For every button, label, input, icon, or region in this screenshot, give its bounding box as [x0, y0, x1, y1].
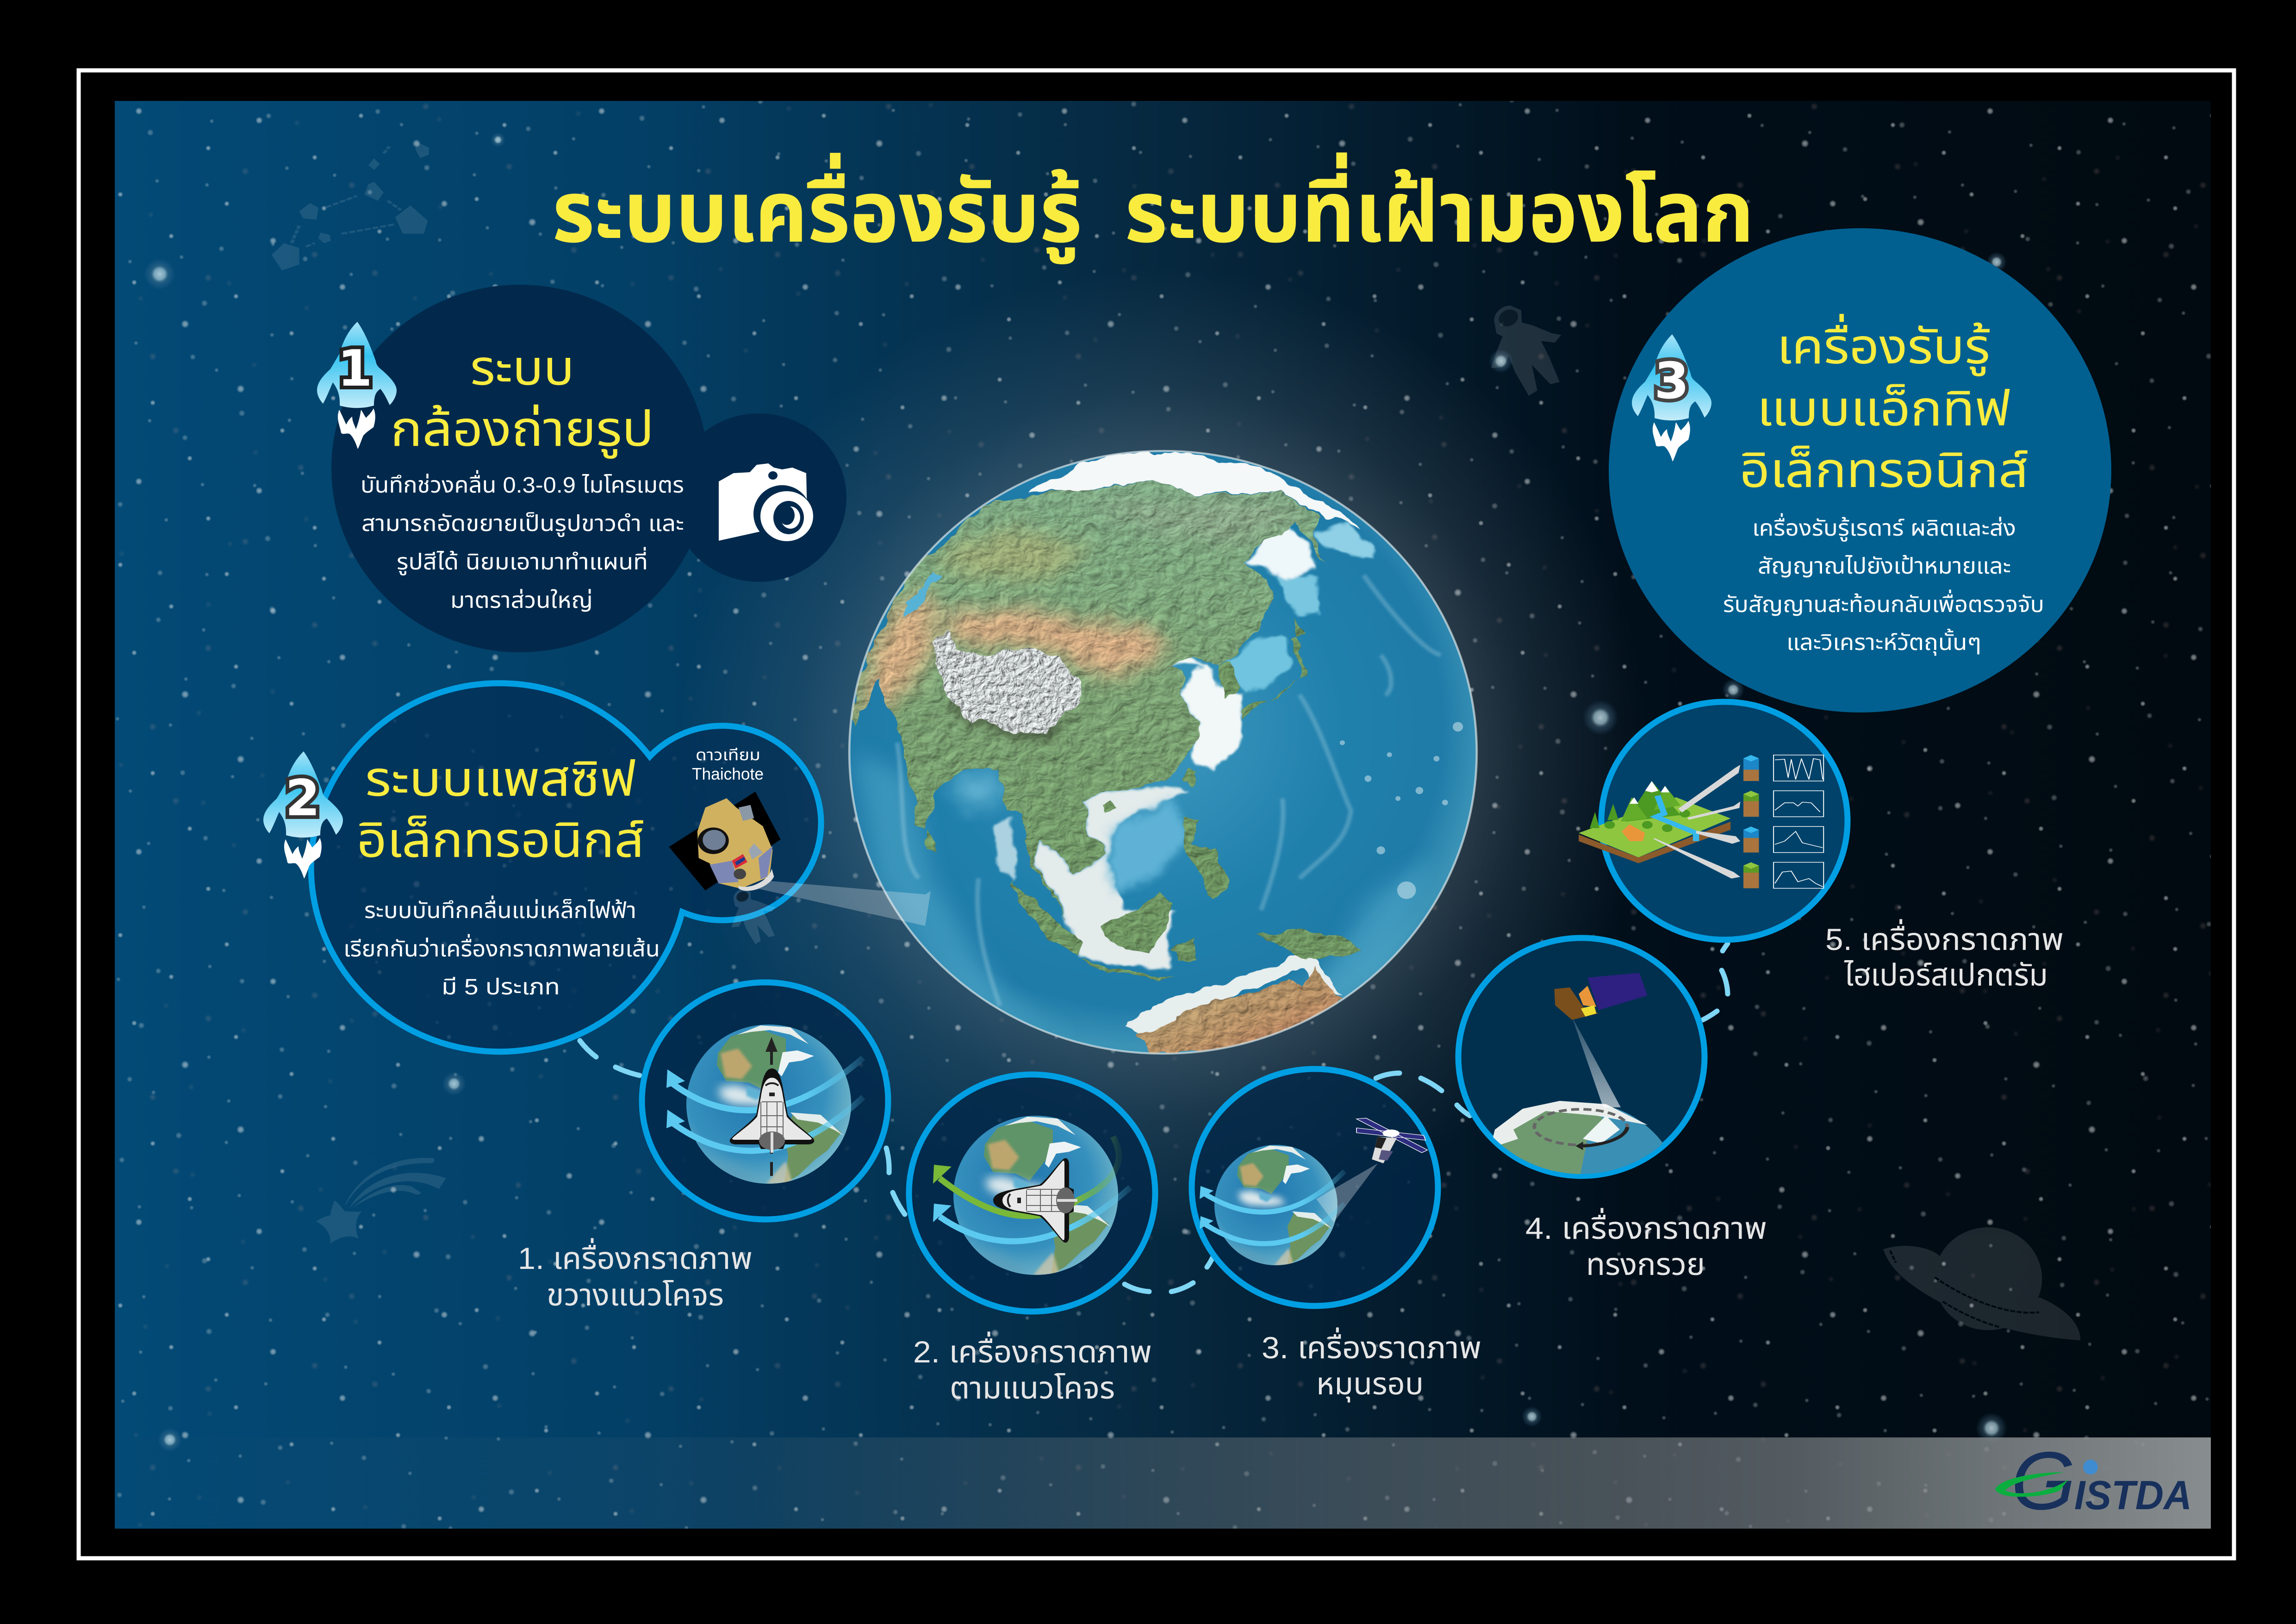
dashed scan path [1534, 1109, 1627, 1150]
panel: system 2 passive electronics bubble [263, 683, 931, 1052]
caption 1: ขวางแนวโคจร [547, 1278, 724, 1312]
body text: รับสัญญานสะท้อนกลับเพื่อตรวจจับ [1723, 589, 2044, 617]
icon: camera [719, 463, 813, 543]
decorative saturn [1883, 1227, 2080, 1340]
connector dashes [580, 943, 1728, 1292]
circle 1: across-track scanner [642, 982, 888, 1219]
caption 5: ไฮเปอร์สเปกตรัม [1844, 958, 2048, 992]
rocket 2 [263, 751, 343, 879]
circle 5: hyperspectral imager [1579, 702, 1848, 940]
decorative constellation [272, 143, 429, 270]
nadir dashed line with arrow [765, 1037, 778, 1182]
caption 2 [913, 1331, 1152, 1405]
arrow heads [1200, 1186, 1213, 1229]
body text: มี 5 ประเภท [442, 975, 560, 999]
orbit arcs [672, 1058, 863, 1151]
body text: สัญญาณไปยังเป้าหมายและ [1758, 554, 2011, 579]
ring [1601, 702, 1848, 940]
heading: เครื่องรับรู้ [1777, 314, 1990, 376]
icon: Thaichote satellite [669, 792, 781, 891]
bubble shape [331, 285, 846, 652]
caption 3: 3. เครื่องราดภาพ [1262, 1327, 1481, 1365]
decorative astronaut [1491, 306, 1561, 396]
title: ระบบเครื่องรับรู้ [552, 153, 1082, 264]
satellite [1356, 1118, 1427, 1163]
sub: northern shelves [1227, 524, 1373, 695]
pointer arrows [1654, 765, 1740, 879]
orbit arcs [1202, 1171, 1344, 1244]
sub: shelf seas [949, 655, 1342, 1036]
sub: scattered pacific islands [1340, 722, 1463, 899]
sensor cone [1572, 1016, 1621, 1107]
caption 3 [1262, 1327, 1481, 1402]
sub: land masses with relief [850, 480, 1362, 1054]
body text: และวิเคราะห์วัตถุนั้นๆ [1786, 629, 1981, 656]
body text: รูปสีได้ นิยมเอามาทำแผนที่ [397, 547, 648, 575]
small globe [1214, 1145, 1338, 1266]
caption 1: 1. เครื่องกราดภาพ [518, 1238, 753, 1275]
small globe [953, 1116, 1118, 1275]
heading: ระบบแพสซิฟ [365, 752, 636, 806]
sub: ocean shading and ridges [854, 575, 1441, 1038]
landscape diorama with data stacks [1579, 755, 1823, 888]
shuttle [993, 1158, 1077, 1243]
orbit arcs [940, 1137, 1130, 1241]
sub: caspian sea [904, 569, 940, 617]
caption 4 [1525, 1208, 1767, 1281]
satellite [1554, 973, 1647, 1020]
body text: สามารถอัดขยายเป็นรูปขาวดำ และ [361, 512, 684, 537]
caption 4: ทรงกรวย [1586, 1247, 1705, 1281]
body text: ระบบบันทึกคลื่นแม่เหล็กไฟฟ้า [364, 895, 636, 923]
rocket 3 [1632, 334, 1711, 462]
caption 4: 4. เครื่องกราดภาพ [1525, 1208, 1767, 1245]
ring [1458, 938, 1705, 1176]
heading line 3: อิเล็กทรอนิกส์ [1740, 443, 2028, 498]
earth cap [1481, 1101, 1685, 1314]
sensor cone [1316, 1163, 1378, 1222]
heading line 2: กล้องถ่ายรูป [391, 402, 654, 459]
caption 5 [1825, 919, 2064, 992]
bubble [1609, 228, 2111, 712]
title: ระบบที่เฝ้ามองโลก [1125, 152, 1754, 260]
body text [1723, 513, 2044, 656]
caption 1 [518, 1238, 753, 1312]
ring [1192, 1069, 1438, 1306]
ring [909, 1074, 1155, 1312]
satellite name: ดาวเทียม [696, 746, 760, 764]
heading: ระบบ [470, 341, 574, 395]
sample stacks [1743, 755, 1759, 888]
GISTDA logo: ISTDA [2074, 1472, 2192, 1518]
rocket 1: 1 [337, 340, 373, 398]
caption 3: หมุนรอบ [1316, 1367, 1424, 1402]
body text: เรียกกันว่าเครื่องกราดภาพลายเส้น [343, 934, 660, 962]
heading line 2: แบบแอ็กทิฟ [1757, 381, 2011, 436]
satellite beam to earth [759, 881, 931, 926]
GISTDA logo: G [2011, 1435, 2076, 1527]
panel: system 3 active electronics bubble [1609, 228, 2111, 712]
body text: มาตราส่วนใหญ่ [450, 588, 593, 613]
shuttle [730, 1068, 814, 1153]
panel: system 1 camera bubble [317, 285, 846, 652]
circle 4: conical scanner [1458, 938, 1705, 1314]
sub: tibet plateau [933, 627, 1081, 743]
title [552, 152, 1754, 264]
ring [642, 982, 888, 1219]
circle 3: rotating scanner [1192, 1069, 1438, 1306]
sub: arctic ice [1026, 454, 1364, 530]
spectral charts [1773, 755, 1823, 888]
satellite name: Thaichote [692, 764, 764, 783]
sub: coast and land with rough edges [850, 454, 1373, 1054]
arrow heads [666, 1069, 685, 1128]
faint astronaut behind satellite [732, 889, 776, 944]
caption 2: ตามแนวโคจร [950, 1371, 1115, 1405]
footer band [115, 1437, 2211, 1529]
island block [1579, 781, 1730, 863]
body text [343, 895, 660, 999]
central earth globe [849, 451, 1477, 1054]
rocket 2: 2 [285, 769, 320, 827]
river [1656, 796, 1696, 841]
caption 2: 2. เครื่องกราดภาพ [913, 1331, 1152, 1369]
body text: เครื่องรับรู้เรดาร์ ผลิตและส่ง [1752, 513, 2016, 542]
decorative comet star [316, 1158, 446, 1243]
body text: บันทึกช่วงคลื่น 0.3-0.9 ไมโครเมตร [361, 470, 684, 498]
caption 5: 5. เครื่องกราดภาพ [1825, 919, 2064, 956]
heading line 2: อิเล็กทรอนิกส์ [357, 813, 644, 868]
satellite name [692, 746, 764, 783]
trees [1590, 804, 1690, 832]
GISTDA logo [1995, 1435, 2192, 1527]
arrow heads [933, 1165, 952, 1222]
rocket 1 [317, 322, 397, 449]
bubble outline [311, 683, 821, 1052]
rocket 3: 3 [1654, 352, 1689, 410]
house [1622, 824, 1645, 841]
body text [361, 470, 684, 613]
small globe [686, 1024, 851, 1184]
circle 2: along-track scanner [909, 1074, 1155, 1312]
